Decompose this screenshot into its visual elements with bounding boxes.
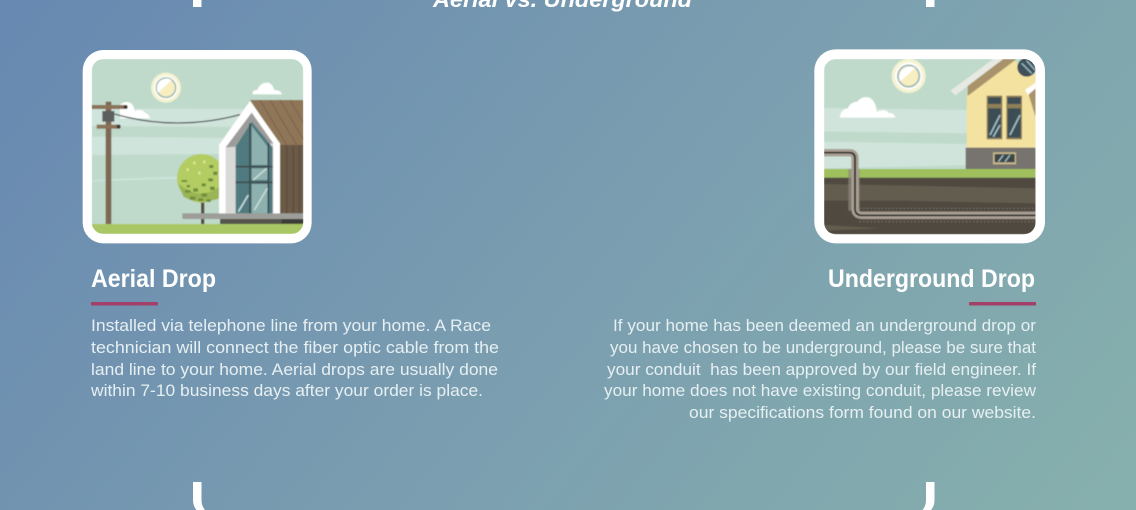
panel: aerial drop bbox=[83, 50, 499, 400]
accent bar bbox=[91, 302, 158, 306]
panel: underground drop bbox=[604, 49, 1045, 422]
body text: underground drop: you have chosen to be underground, please be sure that bbox=[610, 339, 1036, 357]
icon: underground drop illustration bbox=[814, 49, 1045, 243]
heading: aerial drop: Aerial Drop bbox=[91, 265, 216, 293]
heading: underground drop: Underground Drop bbox=[828, 265, 1035, 293]
body text: underground drop: your home does not have existing conduit, please review bbox=[604, 382, 1036, 400]
body text: underground drop: If your home has been deemed an underground drop or bbox=[613, 317, 1037, 335]
accent bar bbox=[969, 302, 1036, 306]
body text: aerial drop: technician will connect the fiber optic cable from the bbox=[91, 339, 499, 357]
body text: aerial drop: Installed via telephone line from your home. A Race bbox=[91, 317, 491, 335]
body text: aerial drop: within 7-10 business days after your order is place. bbox=[90, 382, 483, 400]
body text: aerial drop bbox=[90, 317, 499, 400]
frame bracket marks bbox=[193, 0, 934, 510]
icon: aerial drop illustration bbox=[83, 50, 312, 243]
body text: underground drop bbox=[604, 317, 1037, 422]
body text: aerial drop: land line to your home. Aerial drops are usually done bbox=[91, 361, 498, 379]
body text: underground drop: our specifications form found on our website. bbox=[689, 404, 1036, 422]
body text: underground drop: your conduit has been approved by our field engineer. If bbox=[607, 361, 1036, 379]
